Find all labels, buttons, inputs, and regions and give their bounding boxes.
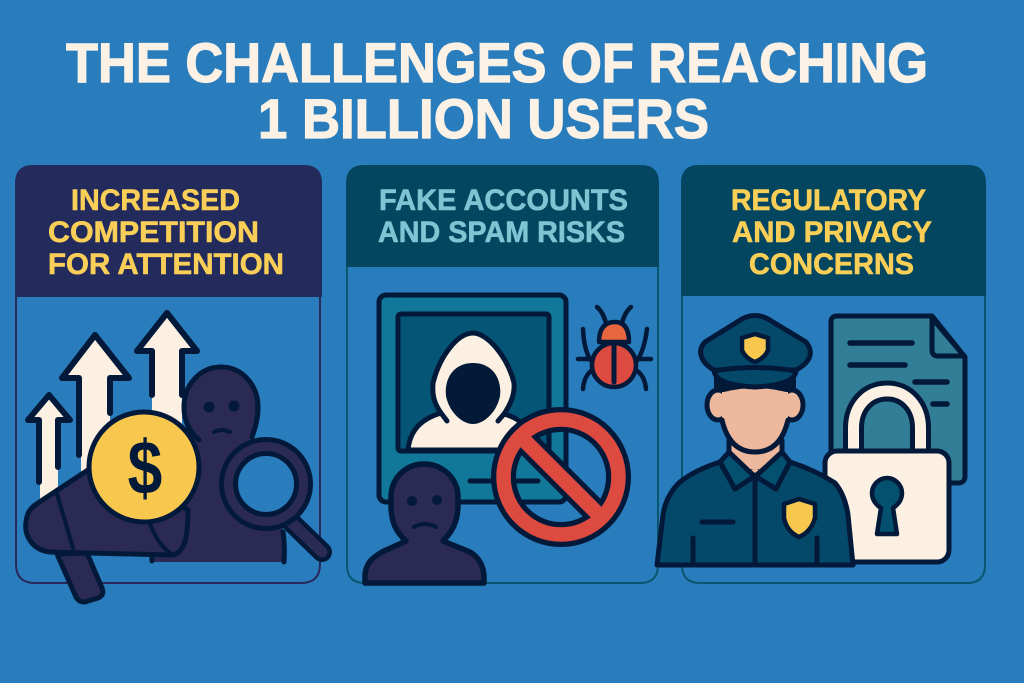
heading: CONCERNS: [749, 248, 914, 281]
heading: COMPETITION: [48, 216, 259, 249]
panel: increased competition: [15, 165, 322, 602]
panel: fake accounts: [346, 165, 659, 583]
icon: worried person: [152, 367, 284, 562]
uniform details: [693, 476, 817, 564]
icon: magnifying glass: [228, 446, 322, 552]
icon: bug: [578, 307, 651, 389]
cap: [714, 372, 796, 392]
heading: FOR ATTENTION: [48, 248, 284, 281]
heading: AND SPAM RISKS: [378, 216, 625, 249]
heading: [378, 184, 628, 249]
icon: dollar coin: [89, 412, 199, 522]
icon: hooded figure: [408, 333, 530, 450]
chest badge: [784, 499, 815, 537]
heading: FAKE ACCOUNTS: [379, 184, 628, 217]
collar: [720, 452, 790, 489]
icon: dollar coin: $: [128, 425, 162, 510]
heading: [731, 184, 932, 281]
panel frame: [347, 260, 658, 583]
panel frame: [16, 290, 320, 583]
icon: profile card: [379, 295, 566, 502]
title: THE CHALLENGES OF REACHING: [66, 31, 928, 94]
icon: megaphone: [26, 462, 188, 602]
icon: sad person: [365, 464, 484, 583]
heading: REGULATORY: [731, 184, 926, 217]
icon: police officer: [657, 316, 853, 565]
heading: [48, 184, 284, 281]
icon: padlock: [825, 391, 949, 562]
panel header: [681, 165, 986, 296]
face: [707, 385, 803, 452]
icon: growth arrows: [27, 313, 199, 505]
title: 1 BILLION USERS: [258, 87, 709, 150]
panel: regulatory and privacy: [657, 165, 986, 583]
uniform: [657, 462, 853, 565]
heading: INCREASED: [71, 184, 240, 217]
panel frame: [682, 290, 985, 583]
heading: AND PRIVACY: [732, 216, 932, 249]
cap badge: [742, 334, 768, 362]
title: [66, 31, 928, 150]
icon: prohibition sign: [504, 420, 618, 534]
neck: [729, 440, 782, 473]
panel header: [346, 165, 659, 267]
panel header: [15, 165, 322, 297]
icon: document: [831, 316, 965, 483]
